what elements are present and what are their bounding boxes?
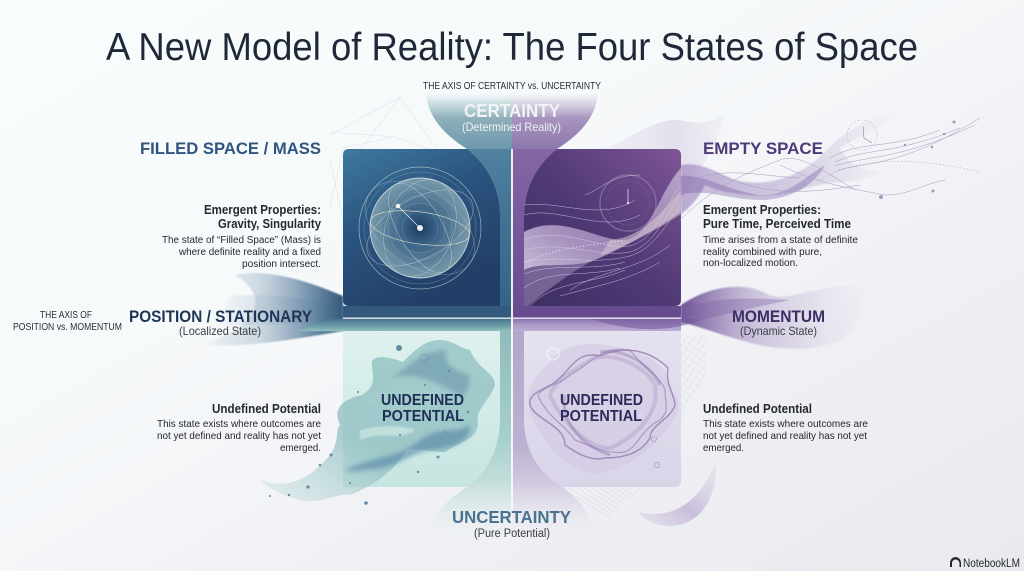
text: empty space description: reality combined with pure, xyxy=(703,246,822,258)
panel: undefined potential left xyxy=(262,331,511,540)
text: filled space description: Gravity, Singularity xyxy=(218,217,321,231)
label: undefined potential: POTENTIAL xyxy=(560,408,642,425)
text: filled space description: The state of “Filled Space” (Mass) is xyxy=(162,234,321,246)
text: filled space description: position intersect. xyxy=(242,258,321,270)
panel side band xyxy=(467,149,511,306)
funnel: uncertainty left xyxy=(428,331,511,540)
axis label: certainty vs uncertainty: THE AXIS OF CERTAINTY vs. UNCERTAINTY xyxy=(423,81,601,92)
label: undefined potential: UNDEFINED xyxy=(560,392,643,409)
title: A New Model of Reality: The Four States of Space xyxy=(106,26,918,69)
text: undefined potential left: emerged. xyxy=(280,442,321,454)
text: undefined potential right: emerged. xyxy=(703,442,744,454)
mesh texture: under lower panel xyxy=(562,487,644,519)
swoosh: bottom right xyxy=(638,462,716,526)
label: momentum: MOMENTUM xyxy=(732,308,825,326)
label: uncertainty: UNCERTAINTY xyxy=(452,507,571,527)
text: empty space description: non-localized motion. xyxy=(703,257,798,269)
label: momentum xyxy=(732,308,825,338)
heading: filled space / mass: FILLED SPACE / MASS xyxy=(140,139,321,158)
text: filled space description: where definite reality and a fixed xyxy=(178,246,321,258)
text: empty space description: Emergent Properties: xyxy=(703,203,821,217)
label: position / stationary xyxy=(129,308,312,338)
label: undefined potential xyxy=(560,392,643,425)
mesh texture: right of lower panel xyxy=(681,335,706,420)
text: empty space description xyxy=(703,203,858,269)
label: undefined potential xyxy=(381,392,464,425)
axis label: position vs momentum: THE AXIS OF xyxy=(40,310,92,321)
text: filled space description xyxy=(162,203,321,270)
label: undefined potential: POTENTIAL xyxy=(382,408,464,425)
axis label: position vs momentum: POSITION vs. MOMENTUM xyxy=(13,322,122,333)
axis band: position xyxy=(200,273,343,346)
decorative geometric wireframe xyxy=(330,97,437,260)
label: certainty: CERTAINTY xyxy=(464,101,560,121)
icon: small clock xyxy=(847,120,877,150)
label: certainty: (Determined Reality) xyxy=(462,120,561,134)
text: undefined potential right xyxy=(703,402,868,454)
text: undefined potential left xyxy=(157,402,321,454)
text: empty space description: Time arises from a state of definite xyxy=(703,234,858,246)
label: uncertainty xyxy=(452,507,571,540)
icon: clock in panel xyxy=(600,175,656,231)
axis band: momentum xyxy=(681,286,875,349)
blob: violet potential xyxy=(528,344,678,473)
axis: certainty funnel xyxy=(426,93,598,318)
label: certainty xyxy=(462,101,561,134)
text: undefined potential left: not yet defined and reality has not yet xyxy=(157,430,321,442)
funnel: uncertainty right xyxy=(513,331,595,540)
label: momentum: (Dynamic State) xyxy=(740,324,817,338)
label: position / stationary: POSITION / STATIONARY xyxy=(129,308,312,326)
text: undefined potential left: Undefined Potential xyxy=(212,402,321,416)
axis lines xyxy=(343,149,681,509)
text: filled space description: Emergent Properties: xyxy=(204,203,321,217)
label: uncertainty: (Pure Potential) xyxy=(474,528,550,540)
text: undefined potential left: This state exists where outcomes are xyxy=(157,418,321,430)
background wash: upper right xyxy=(600,113,725,200)
panel: filled space xyxy=(343,149,511,318)
label: position / stationary: (Localized State) xyxy=(179,324,261,338)
blob: teal potential xyxy=(262,340,495,505)
text: undefined potential right: This state exists where outcomes are xyxy=(703,418,868,430)
icon: sphere of mass xyxy=(348,162,492,294)
panel: undefined potential right xyxy=(513,331,681,540)
heading: empty space: EMPTY SPACE xyxy=(703,139,823,158)
waves in panel xyxy=(524,168,681,306)
text: undefined potential right: Undefined Potential xyxy=(703,402,812,416)
panel: empty space xyxy=(513,149,681,318)
panel side band xyxy=(513,149,557,306)
text: undefined potential right: not yet defined and reality has not yet xyxy=(703,430,867,442)
label: undefined potential: UNDEFINED xyxy=(381,392,464,409)
axis band: lower section xyxy=(300,318,700,332)
waves: extending right from empty space xyxy=(680,113,980,220)
text: empty space description: Pure Time, Perceived Time xyxy=(703,217,851,231)
axis label: position vs momentum xyxy=(13,310,122,333)
